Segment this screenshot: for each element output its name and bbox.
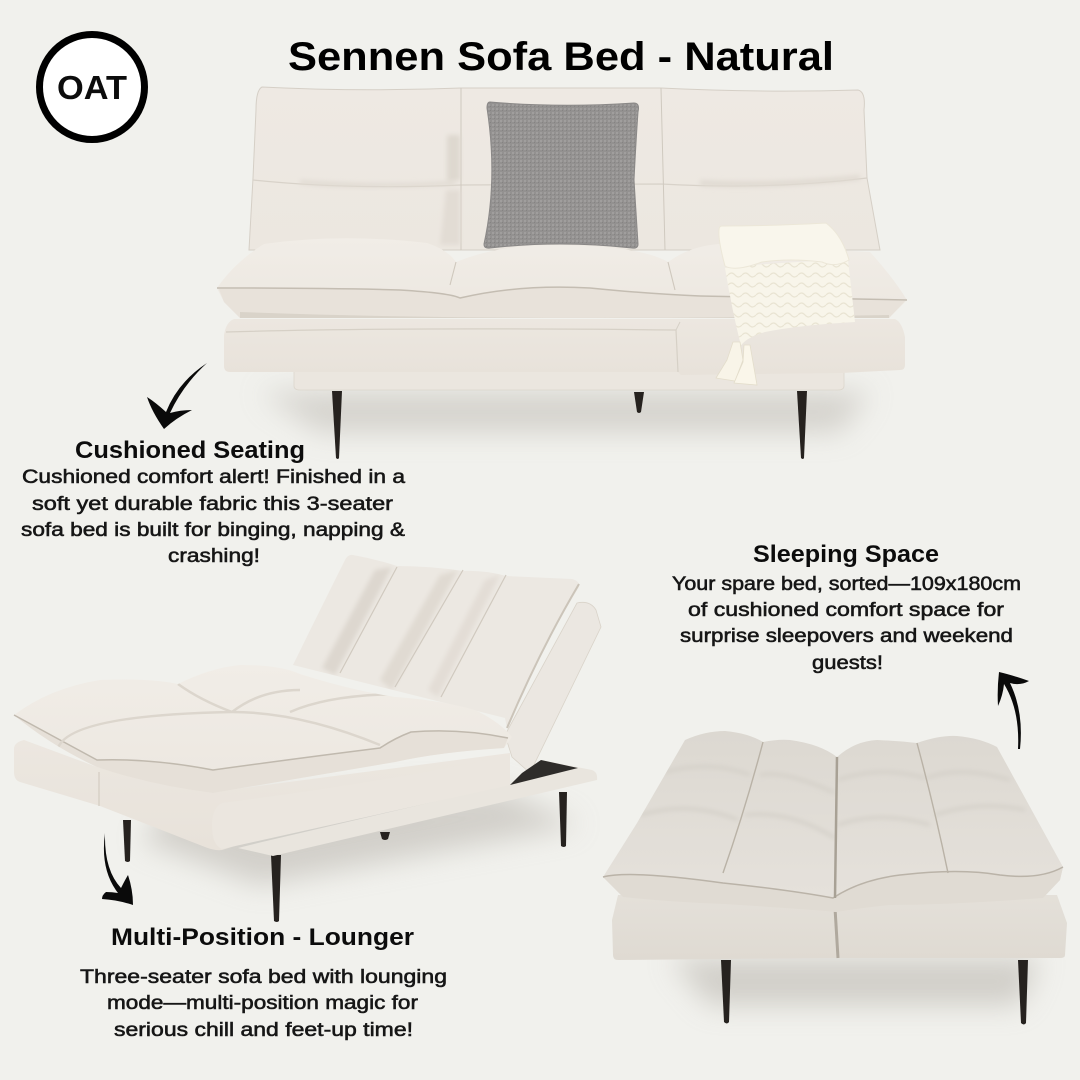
text: Cushioned Seating: soft yet durable fabric this 3-seater — [32, 494, 394, 515]
product photo: sofa bed flat — [603, 731, 1067, 1024]
text: Sleeping Space — [672, 541, 1021, 674]
logo: OAT — [40, 34, 144, 140]
logo: OAT: OAT — [57, 69, 127, 106]
text: Cushioned Seating — [21, 437, 406, 567]
backrest — [293, 555, 579, 728]
seat cushion — [14, 684, 508, 792]
base mattress — [14, 740, 510, 850]
floor shadow — [670, 958, 1040, 1005]
seat cushions — [217, 238, 907, 318]
legs — [123, 792, 567, 922]
floor shadow — [140, 790, 580, 885]
text: Multi-Position - Lounger: Three-seater sofa bed with lounging — [80, 967, 447, 988]
base mattress — [612, 895, 1067, 960]
arrow: to sofa from Cushioned Seating — [147, 363, 207, 429]
floor shadow — [260, 392, 870, 432]
text: Cushioned Seating: Cushioned Seating — [75, 437, 305, 464]
frame rail and dark slats — [238, 760, 597, 856]
text: Multi-Position - Lounger: serious chill and feet-up time! — [114, 1020, 413, 1041]
tassels — [716, 342, 743, 381]
knitted throw — [716, 223, 855, 385]
text: Cushioned Seating: crashing! — [168, 546, 260, 567]
text: Multi-Position - Lounger: Multi-Position - Lounger — [111, 924, 414, 951]
arrow: to lounger — [102, 833, 133, 905]
title: Sennen Sofa Bed - Natural — [288, 35, 834, 79]
grey pillow — [484, 102, 638, 248]
text: Sleeping Space: of cushioned comfort space for — [688, 600, 1005, 621]
text: Sleeping Space: Sleeping Space — [753, 541, 939, 568]
text: Cushioned Seating: sofa bed is built for binging, napping & — [21, 520, 405, 541]
text: Sleeping Space: guests! — [812, 653, 883, 674]
tufted mattress top — [603, 731, 1063, 915]
text: Cushioned Seating: Cushioned comfort alert! Finished in a — [22, 467, 406, 488]
product photo: sofa lounger position — [14, 555, 601, 922]
product photo: sofa upright — [217, 87, 907, 459]
arrow: to sleeping sofa — [998, 672, 1029, 749]
base mattress — [224, 319, 905, 375]
base frame rail — [294, 370, 844, 390]
text: Multi-Position - Lounger: mode—multi-position magic for — [107, 993, 419, 1014]
cushion thickness — [610, 870, 1062, 912]
backrest — [249, 87, 880, 250]
back legs — [332, 391, 807, 459]
text: Sleeping Space: surprise sleepovers and weekend — [680, 626, 1013, 647]
rear back panel — [505, 602, 601, 773]
text: Sleeping Space: Your spare bed, sorted—109x180cm — [672, 574, 1021, 595]
text: Multi-Position - Lounger — [80, 924, 447, 1041]
legs — [721, 960, 1028, 1024]
